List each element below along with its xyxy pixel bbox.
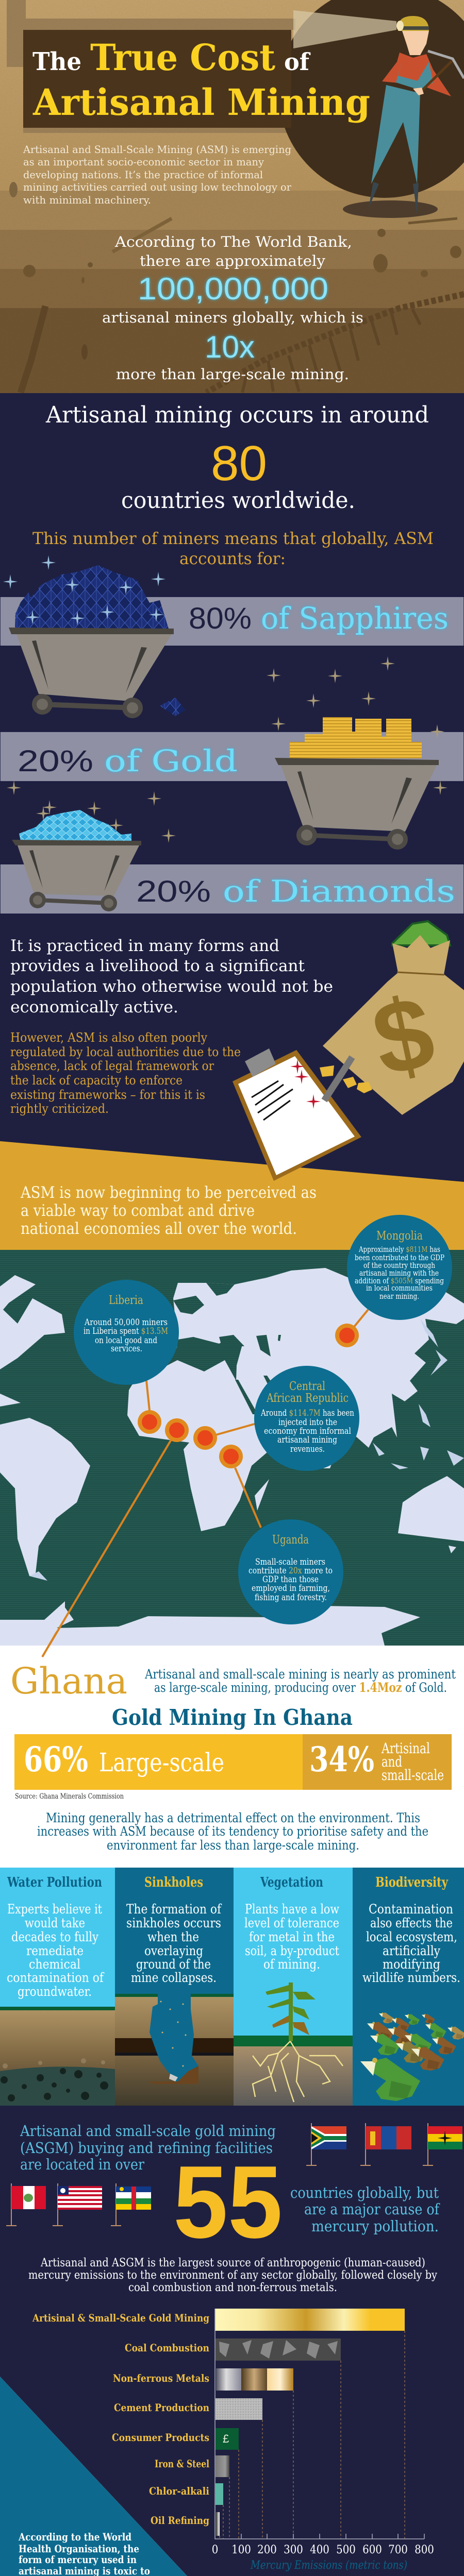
chart: Ghana gold split bar: and [382, 1753, 402, 1770]
panel: vegetation: Vegetation [260, 1875, 323, 1890]
panel: Ghana [0, 1646, 464, 1868]
panel: vegetation: for metal in the [249, 1929, 335, 1944]
callout: Central African Republic: injected into the [278, 1417, 337, 1428]
panel: sinkholes [115, 1868, 234, 2106]
stat: 55 countries: Artisanal and small-scale gold mining [20, 2122, 276, 2140]
title: of [284, 48, 311, 76]
stat: 55 countries: (ASGM) buying and refining facilities [20, 2139, 273, 2157]
callout: Central African Republic: African Republic [266, 1392, 349, 1405]
icon: diamond cart [12, 810, 141, 911]
chart: mercury emissions bar chart: £ [223, 2432, 229, 2445]
chart: Ghana gold split bar: 66% [24, 1739, 88, 1780]
callout: Liberia [74, 1280, 179, 1385]
text: environmental effect: increases with ASM because of its tendency to prioritise safety and the [37, 1824, 428, 1839]
stat band: 20% of diamonds: 20% [136, 875, 211, 908]
stat: 80 countries: accounts for: [179, 549, 286, 568]
text: mercury source: Artisanal and ASGM is the largest source of anthropogenic (human-caused) [40, 2257, 425, 2269]
callout: Liberia: on local good and [95, 1335, 157, 1346]
intro text: with minimal machinery. [23, 194, 151, 206]
text: environmental effect [37, 1810, 428, 1853]
stat band: 20% of gold: of Gold [104, 743, 238, 778]
callout: Uganda: fishing and forestry. [255, 1592, 327, 1603]
chart: mercury emissions bar chart: 100 [231, 2544, 251, 2556]
callout: Mongolia: of the country through [363, 1261, 435, 1270]
callout: Liberia: Around 50,000 miners [84, 1317, 168, 1328]
stat: 80 countries: countries worldwide. [121, 487, 355, 514]
callout: Uganda: contribute 20x more to [248, 1566, 333, 1576]
callout: Central African Republic: Around $114.7M has been [260, 1408, 354, 1418]
icon: money bag: $ [363, 974, 443, 1098]
stat band: 20% of gold [0, 732, 464, 782]
chart: mercury emissions bar chart: Cement Production [114, 2401, 209, 2414]
callout: Central African Republic [254, 1366, 359, 1471]
panel: gold band [0, 1183, 464, 1250]
panel: sinkholes: when the [147, 1929, 199, 1944]
panel: biodiversity: Biodiversity [375, 1875, 449, 1890]
icon: gold cart [7, 656, 448, 850]
panel: biodiversity: Contamination [369, 1902, 453, 1917]
panel: vegetation: soil, a by-product [245, 1943, 339, 1958]
callout: Uganda: employed in farming, [252, 1583, 330, 1594]
callout: Liberia: in Liberia spent $13.5M [84, 1326, 168, 1336]
stat: 55 countries: mercury pollution. [311, 2217, 439, 2235]
intro text: developing nations. It’s the practice of informal [23, 168, 263, 181]
stat band: 20% of diamonds: of Diamonds [223, 874, 455, 909]
chart: mercury emissions bar chart: 700 [388, 2544, 408, 2556]
stat: 80 countries: Artisanal mining occurs in around [45, 402, 429, 428]
panel: vegetation [234, 1868, 353, 2106]
heading: Ghana: Artisanal and small-scale mining is nearly as prominent [144, 1667, 456, 1682]
text: environmental effect: Mining generally has a detrimental effect on the environment. This [46, 1810, 420, 1825]
icon: Liberia flag [53, 2183, 102, 2226]
panel: water pollution: Experts believe it [7, 1902, 102, 1917]
stat: 55 countries: 55 [173, 2145, 283, 2260]
text: mercury source: coal combustion and non-ferrous metals. [128, 2281, 337, 2294]
panel: water pollution: remediate [26, 1943, 84, 1958]
stat: 55 countries: countries globally, but [290, 2184, 439, 2201]
callout: Mongolia: Mongolia [376, 1229, 423, 1243]
chart: mercury emissions bar chart: Artisinal & Small-Scale Gold Mining [32, 2312, 209, 2324]
heading: Ghana: Gold Mining In Ghana [112, 1705, 353, 1730]
stat band: 80% of sapphires [0, 597, 464, 646]
panel: vegetation: Plants have a low [245, 1902, 339, 1917]
text: environmental effect: environment far less than large-scale mining. [107, 1838, 359, 1853]
chart: mercury emissions bar chart: 600 [362, 2544, 382, 2556]
panel: hero background [0, 0, 464, 393]
callout: Mongolia: addition of $505M spending [355, 1276, 444, 1285]
stat: 100,000,000 miners [102, 233, 363, 383]
panel: biodiversity: artificially [383, 1943, 440, 1958]
text: poor regulation: However, ASM is also often poorly [10, 1030, 208, 1045]
line: Ghana connector [42, 1632, 57, 1657]
chart: mercury emissions bar chart: Oil Refining [151, 2514, 209, 2527]
stat: 80 countries: This number of miners means that globally, ASM [32, 529, 434, 548]
chart: mercury emissions bar chart: 400 [310, 2544, 329, 2556]
panel: mercury navy [0, 2106, 464, 2576]
stat: 100,000,000 miners: artisanal miners globally, which is [102, 309, 363, 326]
text: mercury source: mercury emissions to the environment of any sector globally, followed closely by [28, 2269, 438, 2282]
heading: Ghana: as large-scale mining, producing over 1.4Moz of Gold. [154, 1680, 447, 1695]
panel: water pollution: groundwater. [18, 1984, 92, 1999]
title: The [32, 47, 81, 76]
heading: Ghana [10, 1660, 456, 1730]
text: WHO note [18, 2531, 150, 2576]
text: WHO note: form of mercury used in [19, 2553, 137, 2566]
panel: sinkholes: overlaying [144, 1943, 203, 1958]
chart: Ghana gold split bar: Artisinal [381, 1740, 430, 1757]
icon: Central African Republic flag [111, 2183, 151, 2226]
panel: gold diagonal [0, 1141, 464, 1183]
chart: Ghana gold split bar: Large-scale [99, 1748, 224, 1777]
intro text: as an important socio-economic sector in many [23, 156, 264, 168]
icon: sapphire cart [3, 555, 186, 718]
callout lines [42, 1310, 368, 1657]
panel: water pollution: contamination of [7, 1970, 105, 1985]
panel: water pollution: decades to fully [11, 1929, 98, 1944]
stat: 55 countries [20, 2122, 440, 2260]
panel: water pollution: would take [25, 1916, 85, 1930]
stat: 100,000,000 miners: 100,000,000 [138, 272, 328, 306]
text: WHO note: According to the World [18, 2531, 131, 2543]
title plate [23, 30, 291, 128]
source: Ghana: Source: Ghana Minerals Commission [15, 1792, 124, 1801]
text: livelihood: economically active. [10, 998, 178, 1016]
chart: mercury emissions bar chart: Mercury Emissions (metric tons) [250, 2559, 407, 2572]
panel: water pollution: Water Pollution [7, 1875, 102, 1890]
chart: mercury emissions bar chart: 300 [284, 2544, 303, 2556]
panel: biodiversity: modifying [383, 1957, 440, 1972]
icon: clipboard report [233, 1048, 372, 1181]
stat: 100,000,000 miners: According to The World Bank, [114, 233, 352, 250]
stat: 55 countries: are a major cause of [304, 2200, 440, 2218]
text: WHO note: Health Organisation, the [19, 2543, 139, 2555]
panel: vegetation: level of tolerance [244, 1916, 339, 1930]
callout: Uganda: Uganda [272, 1533, 309, 1547]
text: poor regulation: regulated by local authorities due to the [10, 1045, 241, 1059]
callout: Uganda: GDP than those [262, 1574, 319, 1585]
callout: Uganda [238, 1519, 343, 1624]
text: viable way [20, 1183, 317, 1238]
chart: mercury emissions bar chart: Consumer Products [112, 2431, 209, 2444]
chart: mercury emissions bar chart: Non-ferrous Metals [113, 2372, 209, 2384]
text: livelihood: population who otherwise would not be [10, 977, 333, 996]
callout: Mongolia: Approximately $811M has [358, 1245, 440, 1254]
chart: Ghana gold split bar: 34% [309, 1739, 374, 1780]
panel: biodiversity [353, 1868, 464, 2106]
callout: Mongolia: in local communities [366, 1283, 433, 1293]
intro text: Artisanal and Small-Scale Mining (ASM) is emerging [23, 143, 291, 156]
panel: teal body background [0, 2377, 464, 2576]
stat band: 80% of sapphires: 80% [189, 602, 252, 635]
stat: 100,000,000 miners: more than large-scale mining. [116, 366, 349, 383]
chart: mercury emissions bar chart: 500 [336, 2544, 356, 2556]
panel: vegetation: of mining. [263, 1957, 320, 1972]
chart: mercury emissions bar chart: Chlor-alkali [149, 2485, 209, 2497]
callout: Mongolia [347, 1215, 452, 1320]
icon: Mongolia flag [360, 2123, 411, 2165]
icon: South Africa flag [306, 2123, 346, 2165]
text: poor regulation: the lack of capacity to enforce [10, 1073, 183, 1088]
stat band: 80% of sapphires: of Sapphires [261, 601, 449, 636]
callout: Liberia: Liberia [109, 1294, 143, 1307]
title: True Cost [90, 36, 275, 79]
panel: world map [0, 1250, 464, 1646]
panel: sinkholes: ground of the [136, 1957, 211, 1972]
text: livelihood: provides a livelihood to a significant [10, 957, 305, 975]
text: poor regulation: rightly criticized. [10, 1101, 109, 1116]
chart: mercury emissions bar chart: 200 [257, 2544, 277, 2556]
stat: 80 countries [32, 402, 434, 568]
icon: Peru flag [6, 2183, 46, 2226]
chart: mercury emissions bar chart: 0 [212, 2544, 218, 2556]
title [32, 36, 370, 124]
callout: Central African Republic: revenues. [290, 1444, 325, 1454]
callout: Mongolia: been contributed to the GDP [355, 1253, 444, 1262]
callout: Mongolia: near mining. [379, 1292, 419, 1301]
text: viable way: national economies all over the world. [21, 1219, 297, 1238]
chart: Ghana gold split bar: small-scale [382, 1767, 444, 1784]
text: poor regulation [10, 1030, 241, 1116]
panel: sinkholes: The formation of [126, 1902, 222, 1917]
chart: mercury emissions bar chart: 800 [415, 2544, 434, 2556]
text: viable way: a viable way to combat and drive [21, 1201, 255, 1220]
chart: mercury emissions bar chart [32, 2309, 434, 2572]
icon: Ghana flag [423, 2123, 462, 2165]
icon: money bag [323, 921, 464, 1115]
text: poor regulation: existing frameworks – for this it is [10, 1088, 205, 1102]
panel: water pollution [0, 1868, 115, 2106]
panel: biodiversity: local ecosystem, [366, 1929, 457, 1944]
chart: Ghana gold split bar [14, 1734, 452, 1790]
callout: Central African Republic: Central [289, 1380, 325, 1393]
callout: Central African Republic: economy from informal [264, 1426, 351, 1436]
stat band: 20% of diamonds [0, 864, 464, 914]
stat: 80 countries: 80 [211, 436, 267, 491]
text: poor regulation: absence, lack of legal framework or [10, 1059, 214, 1073]
chart: mercury emissions bar chart: Coal Combustion [125, 2342, 209, 2354]
circle: mine backdrop [278, 0, 464, 198]
chart: mercury emissions bar chart: Iron & Steel [155, 2458, 209, 2470]
intro text: mining activities carried out using low technology or [23, 181, 291, 193]
text: mercury source [28, 2257, 438, 2294]
panel: biodiversity: also effects the [370, 1916, 453, 1930]
panel: water pollution: chemical [29, 1957, 80, 1972]
callout: Liberia: services. [111, 1344, 142, 1354]
stat: 55 countries: are located in over [20, 2156, 145, 2173]
stat: 100,000,000 miners: there are approximately [140, 252, 326, 269]
map pins [138, 1324, 359, 1468]
callout: Mongolia: artisanal mining with the [359, 1268, 439, 1278]
callout: Central African Republic: artisanal mining [277, 1435, 337, 1445]
icon: miner with pickaxe [293, 10, 464, 218]
text: viable way: ASM is now beginning to be perceived as [20, 1183, 317, 1202]
panel: biodiversity: wildlife numbers. [362, 1970, 460, 1985]
title: Artisanal Mining [32, 81, 370, 124]
stat band: 20% of gold: 20% [18, 744, 93, 778]
stat: 100,000,000 miners: 10x [205, 330, 255, 364]
text: livelihood: It is practiced in many forms and [10, 937, 279, 955]
panel: sinkholes: Sinkholes [144, 1875, 203, 1890]
callout: Uganda: Small-scale miners [255, 1557, 325, 1567]
panel: navy commodities [0, 393, 464, 1182]
heading: Ghana: Ghana [10, 1660, 127, 1702]
intro text [23, 143, 291, 206]
panel: sinkholes: sinkholes occurs [126, 1916, 221, 1930]
panel: sinkholes: mine collapses. [131, 1970, 217, 1985]
text: livelihood [10, 937, 333, 1016]
